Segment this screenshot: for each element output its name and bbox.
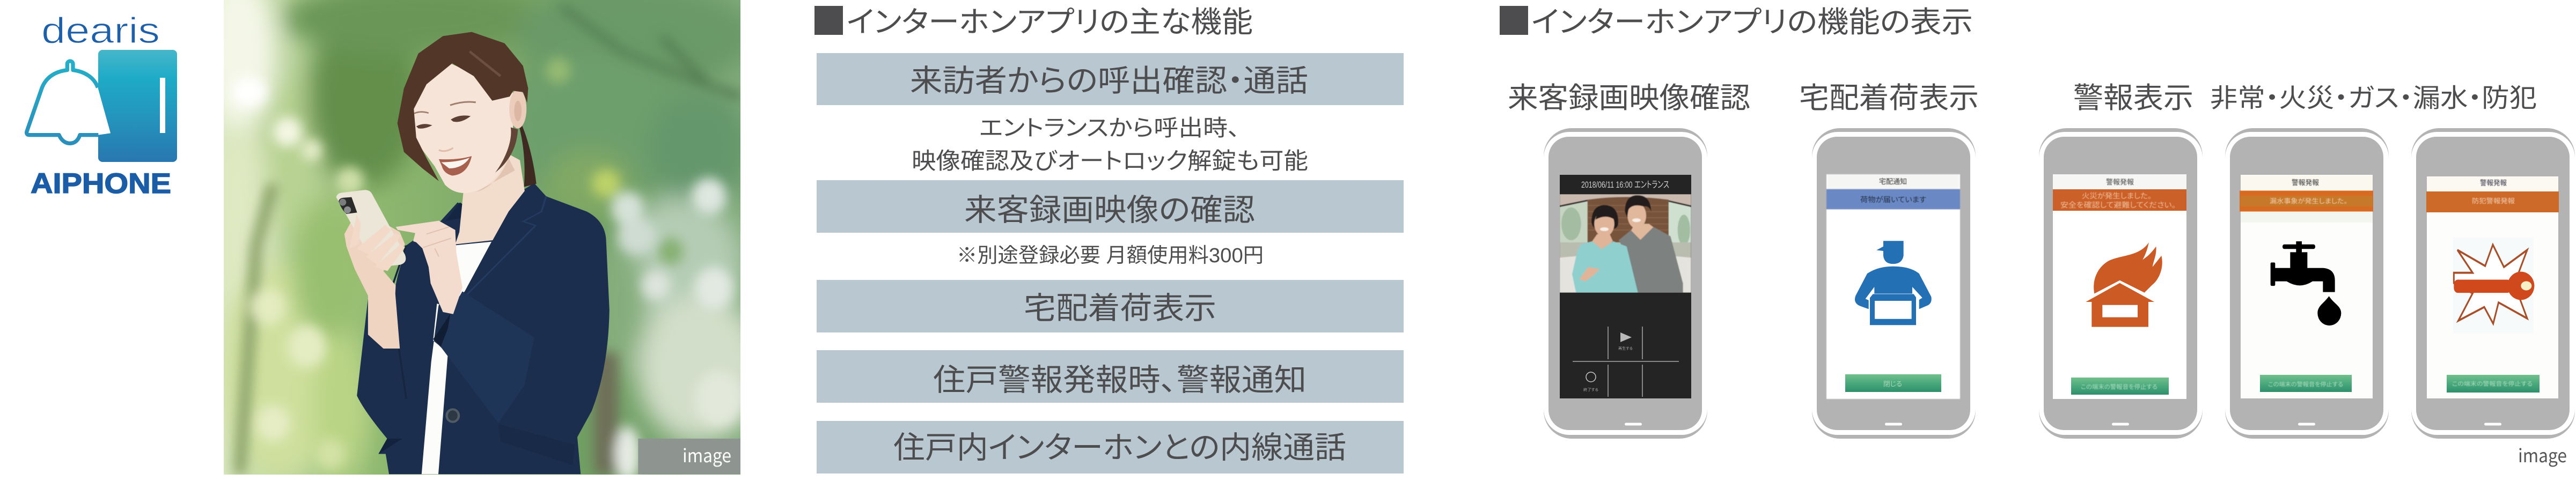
button: close [1845,374,1941,392]
icon: house on fire [2086,242,2162,327]
feature bar: internal call: 住戸内インターホンとの内線通話 [893,431,1346,465]
button: close: 閉じる [1883,380,1902,388]
feature bar: alarm notification [817,350,1404,403]
button: stop alarm: この端末の警報音を停止する [2268,381,2343,388]
phone: delivery notification screen [1812,128,1976,439]
button: stop alarm: この端末の警報音を停止する [2081,383,2157,390]
screen text: delivery notice: 宅配通知 [1879,177,1907,186]
screen text: security notice: 防犯警報発報 [2472,197,2515,205]
figure: woman [336,32,610,474]
figure: jacket and lower body [357,183,610,474]
screen text: fire alarm notice: 警報発報 [2106,178,2134,186]
screen text: water leak notice: 警報発報 [2292,179,2319,187]
label: alarm display: 警報表示 [2073,82,2193,114]
screen text: delivery notice: 荷物が届いています [1860,196,1926,204]
phone: visitor recording screen [1544,128,1707,439]
icon: door panel [98,50,177,162]
description: entrance call text: エントランスから呼出時、 [979,115,1240,140]
feature bar: visitor call confirmation and talk [817,53,1404,105]
phone: fire alarm screen [2039,128,2203,439]
label: delivery arrival display: 宅配着荷表示 [1799,82,1979,114]
button: stop alarm [2071,378,2169,395]
screen text: fire alarm notice: 安全を確認して避難してください。 [2060,201,2176,209]
feature bar: internal call [817,421,1404,473]
description: entrance call text: 映像確認及びオートロック解錠も可能 [912,149,1308,174]
description: entrance call text [912,115,1308,174]
figure: head, hands and phone [336,32,537,349]
photo background: blurred green foliage [203,0,762,481]
screen controls: play and end buttons: 終了する [1583,387,1598,392]
video frame: smiling couple [1560,194,1691,293]
photo: woman in navy suit using smartphone outdoors [203,0,762,481]
screen text: water leak notice: 漏水事象が発生しました。 [2270,197,2347,205]
note: separate registration and monthly fee: ※別途登録必要 月額使用料300円 [957,245,1264,267]
logo wordmark: AIPHONE: AIPHONE [31,168,171,199]
screen text: fire alarm notice: 火災が発生しました。 [2082,192,2152,200]
heading: function display: インターホンアプリの機能の表示 [1531,5,1973,39]
panel: display of intercom app functions [1500,5,2575,468]
screen text: water leak notice [2270,179,2347,205]
phone: water leak alarm screen [2225,128,2389,439]
screen text: security notice [2472,179,2515,205]
screen controls: play and end buttons: 再生する [1618,346,1633,351]
icon: delivery person carrying box [1855,241,1932,325]
icon: dripping faucet [2271,241,2341,325]
logo wordmark: dearis: dearis [41,10,160,51]
screen controls: play and end buttons [1573,327,1679,397]
feature bar: alarm notification: 住戸警報発報時、警報通知 [933,363,1307,397]
label: recorded visitor video: 来客録画映像確認 [1508,82,1750,114]
photo background: grey building [638,439,740,474]
photo credit: image: image [682,441,731,468]
panel: main functions of the intercom app [814,5,1404,473]
feature bar: recorded visitor video [817,180,1404,233]
label: alarm types: 非常・火災・ガス・漏水・防犯 [2210,84,2537,113]
phone: security alarm screen [2411,128,2575,439]
feature bar: visitor call confirmation and talk: 来訪者からの呼出確認・通話 [910,64,1308,98]
logo: dearis AIPHONE app icon [27,10,177,199]
feature bar: delivery arrival display: 宅配着荷表示 [1024,291,1216,325]
icon: bell [27,61,111,143]
screen text: date and entrance: 2018/06/11 16:00 エントランス [1581,180,1669,190]
button: stop alarm [2447,375,2540,393]
icon: door handle [160,78,165,133]
screen text: delivery notice [1860,177,1926,204]
feature bar: delivery arrival display [817,280,1404,332]
button: stop alarm: この端末の警報音を停止する [2452,380,2533,387]
heading: main functions: インターホンアプリの主な機能 [847,5,1253,39]
icon: key with burst [2453,238,2534,333]
screen text: security notice: 警報発報 [2480,179,2507,187]
feature bar: recorded visitor video: 来客録画映像の確認 [964,193,1255,227]
button: stop alarm [2260,375,2352,392]
screen text: fire alarm notice [2060,178,2176,209]
credit: image: image [2518,441,2567,468]
